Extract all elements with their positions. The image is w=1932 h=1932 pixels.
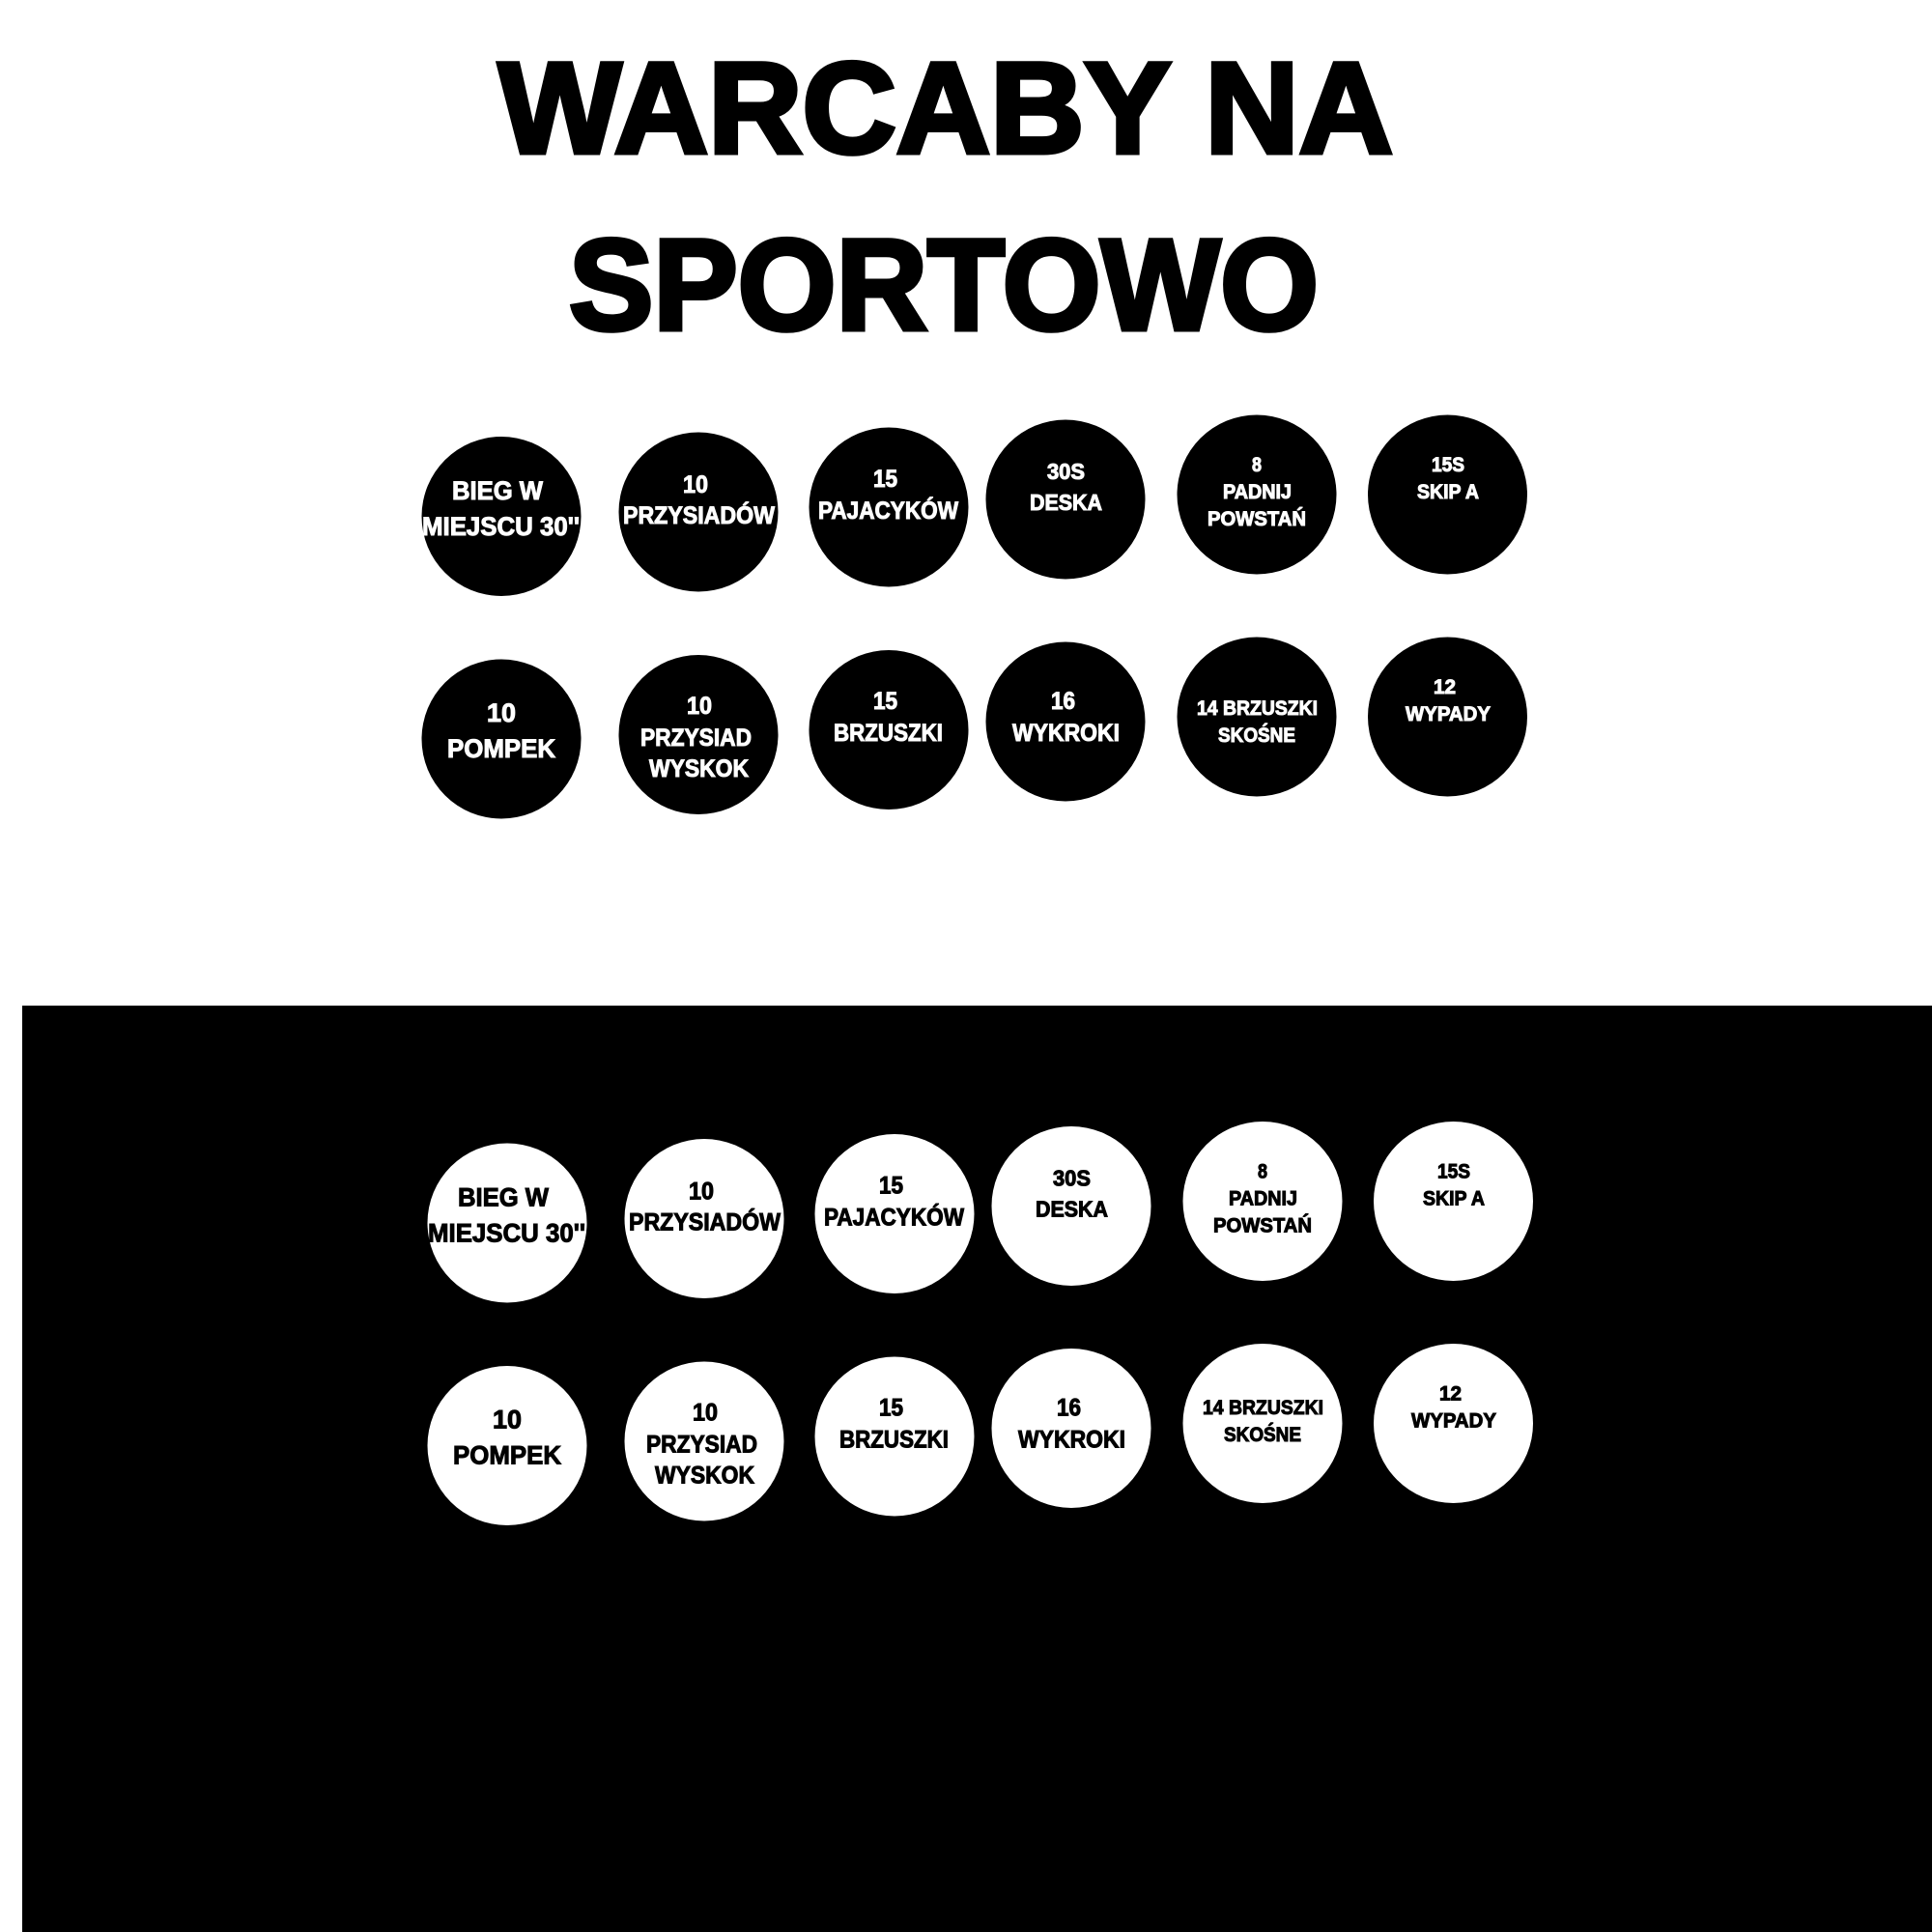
piece: 10 przysiad wyskok [618,655,779,814]
piece: 30s deska [991,1126,1151,1286]
piece: 12 wypady: 12 [1434,676,1456,698]
piece: bieg w miejscu [421,437,582,596]
piece: 15 pajacyków: PAJACYKÓW [824,1202,964,1231]
piece: 16 wykroki: WYKROKI [1018,1426,1125,1453]
piece: 10 przysiad wyskok: WYSKOK [655,1463,754,1490]
piece: 15s skip a [1374,1122,1533,1281]
piece: 10 przysiad wyskok: 10 [687,693,712,720]
piece: 10 przysiadów: 10 [689,1179,714,1206]
piece: 16 wykroki: WYKROKI [1012,720,1120,747]
piece: 15s skip a: SKIP A [1423,1188,1485,1209]
piece: 8 padnij powstań: PADNIJ [1223,481,1292,503]
title: SPORTOWO [569,213,1319,357]
piece: 15s skip a: SKIP A [1417,481,1479,503]
piece: 12 wypady: 12 [1439,1383,1462,1405]
piece: bieg w miejscu: MIEJSCU 30'' [422,512,580,541]
piece: 10 przysiad wyskok: PRZYSIAD [646,1432,757,1459]
piece: 10 przysiadów [618,433,779,591]
piece: 15 pajacyków [815,1134,974,1293]
piece: 10 pompek: 10 [487,698,516,727]
panel: black board [22,1006,1932,1932]
piece: 15 brzuszki [815,1356,974,1517]
piece: bieg w miejscu: MIEJSCU 30'' [428,1219,585,1248]
piece: 15s skip a: 15S [1432,454,1464,476]
piece: 12 wypady: WYPADY [1406,703,1491,725]
piece: 14 brzuszki skośne: 14 BRZUSZKI [1197,697,1318,720]
piece: 8 padnij powstań: POWSTAŃ [1208,508,1306,530]
piece: 15 brzuszki: BRZUSZKI [839,1426,949,1453]
piece: 14 brzuszki skośne: SKOŚNE [1224,1423,1301,1446]
piece: 15 pajacyków: 15 [879,1173,903,1200]
piece: 10 przysiad wyskok [624,1362,784,1520]
piece: 8 padnij powstań [1182,1122,1343,1281]
piece: 12 wypady: WYPADY [1411,1410,1496,1432]
piece: 15 brzuszki: 15 [873,688,897,715]
piece: 30s deska: DESKA [1036,1196,1108,1221]
piece: 15s skip a [1368,415,1527,574]
piece: 15 brzuszki [810,650,968,810]
piece: 10 przysiadów [624,1139,784,1298]
piece: 16 wykroki: 16 [1051,688,1075,715]
piece: 15 pajacyków [810,427,968,587]
piece: 14 brzuszki skośne: SKOŚNE [1218,724,1295,747]
piece: 16 wykroki [991,1349,1151,1508]
piece: 10 przysiad wyskok: WYSKOK [649,755,749,782]
piece: 8 padnij powstań [1177,415,1337,574]
piece: 30s deska: 30S [1047,459,1085,484]
title [498,37,1393,357]
piece: 10 pompek: 10 [493,1405,522,1434]
piece: 10 przysiad wyskok: 10 [693,1399,718,1426]
piece: 10 pompek [421,659,582,819]
piece: 8 padnij powstań: PADNIJ [1229,1188,1297,1209]
piece: 14 brzuszki skośne [1182,1344,1343,1503]
piece: 14 brzuszki skośne [1177,638,1337,796]
piece: 8 padnij powstań: POWSTAŃ [1213,1215,1312,1236]
piece: 15 brzuszki: BRZUSZKI [834,720,943,747]
panel: white game pieces on black [427,1122,1533,1525]
piece: bieg w miejscu: BIEG W [452,476,543,505]
piece: 12 wypady [1368,638,1527,796]
piece: 10 pompek [427,1366,587,1525]
panel: black game pieces on white [421,415,1527,819]
piece: 15 brzuszki: 15 [879,1395,903,1422]
piece: 15 pajacyków: PAJACYKÓW [818,496,958,525]
piece: 10 przysiadów: PRZYSIADÓW [623,500,775,529]
piece: 15s skip a: 15S [1437,1161,1470,1182]
piece: 30s deska: 30S [1053,1165,1091,1190]
piece: 10 pompek: POMPEK [447,734,555,763]
piece: 10 przysiadów: PRZYSIADÓW [629,1208,781,1236]
title: WARCABY NA [498,37,1393,181]
piece: 16 wykroki: 16 [1057,1395,1081,1422]
piece: 14 brzuszki skośne: 14 BRZUSZKI [1203,1397,1323,1419]
piece: bieg w miejscu: BIEG W [458,1182,549,1211]
piece: 30s deska: DESKA [1030,490,1102,515]
piece: 10 przysiad wyskok: PRZYSIAD [640,724,752,752]
piece: 8 padnij powstań: 8 [1258,1161,1267,1182]
piece: 30s deska [985,419,1146,580]
piece: 12 wypady [1374,1344,1533,1503]
piece: 15 pajacyków: 15 [873,466,897,493]
piece: 10 przysiadów: 10 [683,471,708,498]
piece: 8 padnij powstań: 8 [1252,454,1262,476]
piece: bieg w miejscu [427,1144,587,1302]
piece: 16 wykroki [985,641,1146,802]
piece: 10 pompek: POMPEK [453,1441,561,1470]
